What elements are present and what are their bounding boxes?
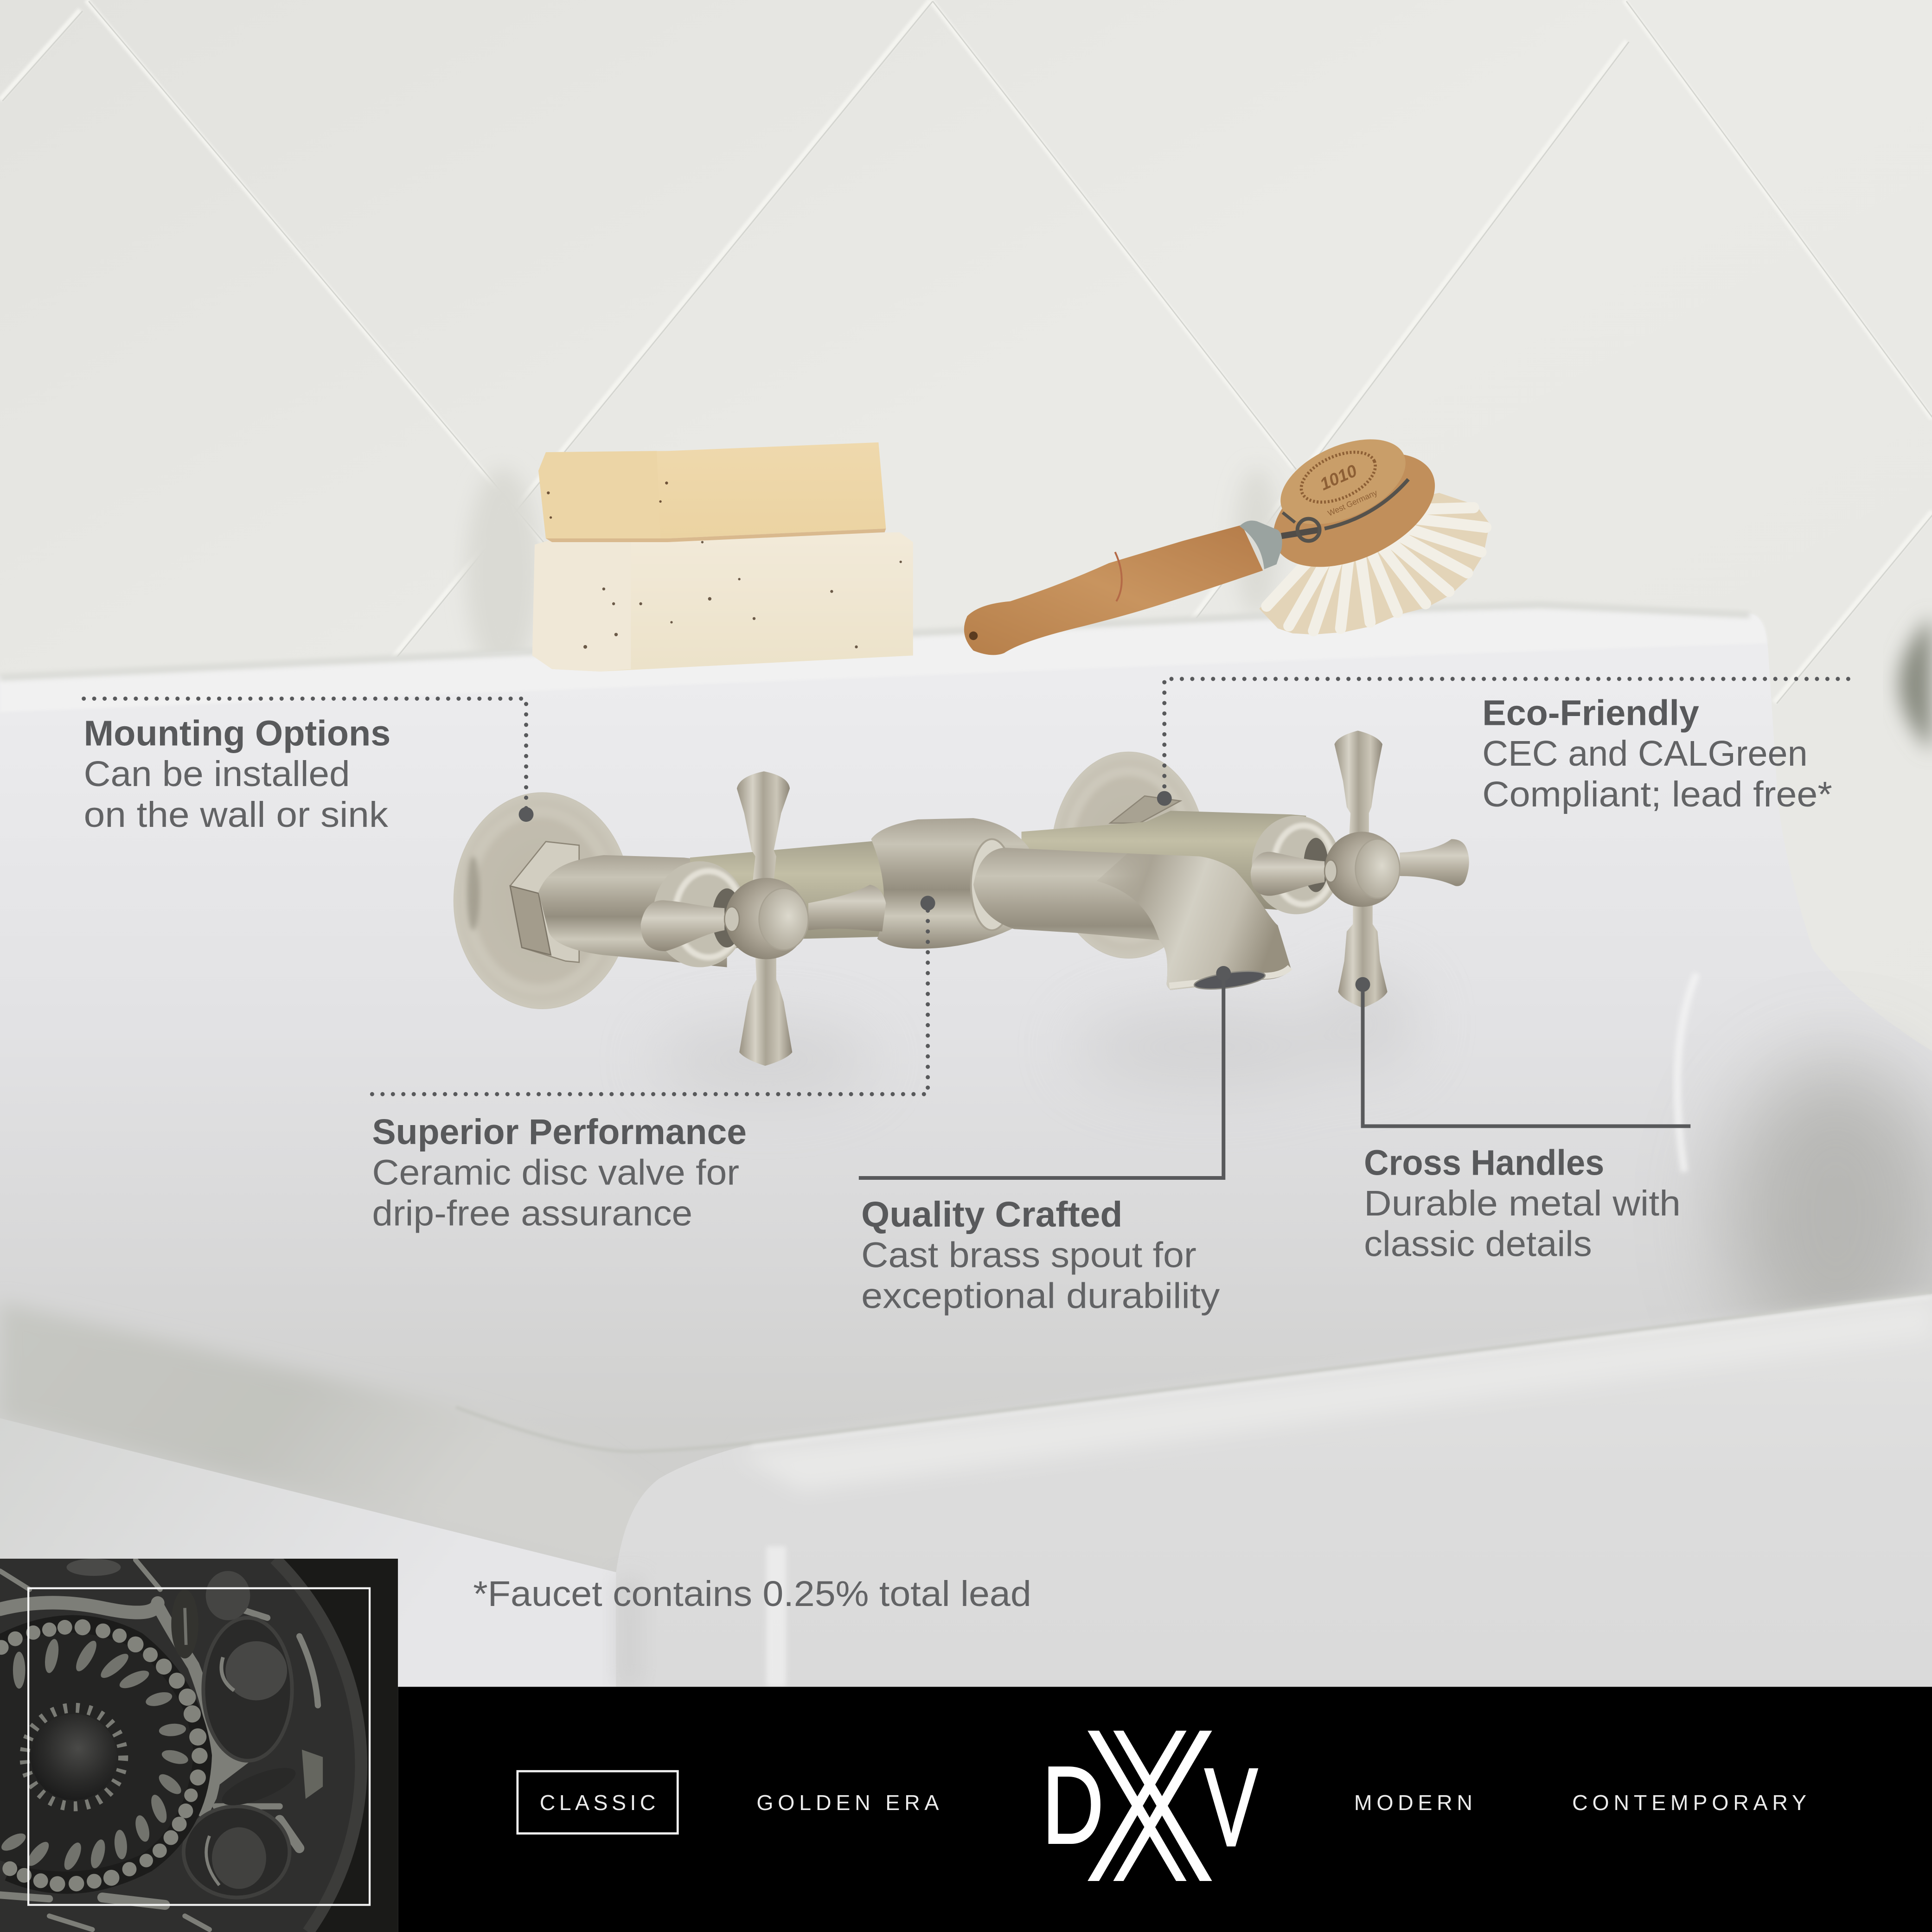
right valve body: [1252, 816, 1341, 914]
left valve body: [653, 861, 747, 967]
ledge: [0, 604, 1767, 712]
metal ferrule and wire: [1281, 530, 1320, 536]
upper soap bar: [538, 442, 886, 542]
soap bars: [532, 442, 913, 672]
medallion petals: [0, 1638, 190, 1872]
disc stamp: [1294, 442, 1388, 524]
right basin rim: [616, 1294, 1932, 1687]
tiled wall background: [0, 0, 1932, 1109]
light ground between relief: [0, 1560, 318, 1930]
callout: Eco-Friendly: CEC and CALGreen: [1482, 734, 1808, 774]
callout: Cross Handles: Durable metal with: [1364, 1184, 1681, 1223]
callout: Superior Performance: drip-free assurance: [372, 1193, 692, 1233]
callout: Superior Performance: [372, 896, 935, 1233]
medallion inner disc: [0, 1632, 193, 1872]
callout: Quality Crafted: [859, 966, 1231, 1316]
disc stamp: West Germany: [1326, 488, 1379, 518]
nav: MODERN: MODERN: [1354, 1791, 1472, 1815]
shadow band: [0, 1302, 672, 1572]
left body: [538, 855, 727, 967]
medallion relief swirls: [66, 1559, 300, 1898]
callout: Cross Handles: classic details: [1364, 1224, 1592, 1264]
medallion frame: [28, 1588, 370, 1905]
DXV logo: V: [1205, 1745, 1258, 1869]
bristle tufts: [1267, 508, 1486, 631]
left cross handle: [641, 771, 886, 1066]
right wall flange: [1051, 752, 1206, 959]
callout: Eco-Friendly: Compliant; lead free*: [1482, 774, 1832, 814]
callout: Cross Handles: Cross Handles: [1364, 1143, 1604, 1183]
wire ring: [1283, 480, 1408, 541]
right cross handle: [1251, 731, 1469, 1008]
nav: GOLDEN ERA: GOLDEN ERA: [756, 1791, 939, 1815]
front supply bar: [690, 839, 896, 955]
top wooden disc: [1268, 422, 1418, 542]
callout: Quality Crafted: Cast brass spout for: [861, 1235, 1196, 1275]
rear supply bar: [1022, 811, 1306, 912]
lower basin forms: [0, 1292, 1932, 1687]
aerator: [1193, 968, 1266, 992]
disc stamp: 1010: [1317, 461, 1360, 494]
footnote: *Faucet contains 0.25% total lead: [473, 1574, 1031, 1614]
black footer band: [398, 1687, 1932, 1932]
left wall flange: [454, 792, 631, 1009]
callout: Eco-Friendly: [1157, 679, 1848, 814]
callout: Eco-Friendly: Eco-Friendly: [1482, 693, 1699, 733]
faucet wall shadows: [653, 973, 1417, 1097]
nav: CONTEMPORARY: CONTEMPORARY: [1572, 1791, 1806, 1815]
medallion beads: [0, 1619, 208, 1892]
nav: CLASSIC selected: [518, 1771, 678, 1833]
panel: ornamental medallion: [0, 1559, 398, 1932]
bristle fan: [1259, 493, 1490, 634]
lower soap bar: [532, 532, 913, 672]
medallion disc: [0, 1559, 361, 1932]
callout: Mounting Options: on the wall or sink: [84, 795, 388, 835]
faucet: [454, 731, 1469, 1097]
callout: Cross Handles: [1356, 977, 1690, 1264]
callout: Quality Crafted: exceptional durability: [861, 1276, 1220, 1316]
DXV logo: D: [1042, 1744, 1104, 1867]
dish brush: [964, 422, 1490, 655]
medallion hub: [25, 1708, 123, 1806]
callout: Mounting Options: Can be installed: [84, 754, 350, 794]
callout: Quality Crafted: Quality Crafted: [861, 1195, 1122, 1235]
center collar: [871, 818, 1029, 949]
spout: [971, 839, 1291, 990]
callout: Mounting Options: Mounting Options: [84, 713, 390, 753]
handle: [964, 525, 1263, 655]
medallion bead ring base: [0, 1627, 199, 1881]
callout: Superior Performance: Ceramic disc valve for: [372, 1153, 739, 1193]
DXV logo: [1042, 1731, 1258, 1881]
back wooden disc: [1256, 430, 1452, 590]
sink back panel: [0, 604, 1932, 1687]
left hex nut: [510, 842, 579, 962]
front-left plate: [0, 1418, 616, 1687]
callout: Mounting Options: [84, 698, 533, 835]
callout: Superior Performance: Superior Performance: [372, 1112, 747, 1152]
nav: CLASSIC selected: CLASSIC: [540, 1791, 655, 1815]
